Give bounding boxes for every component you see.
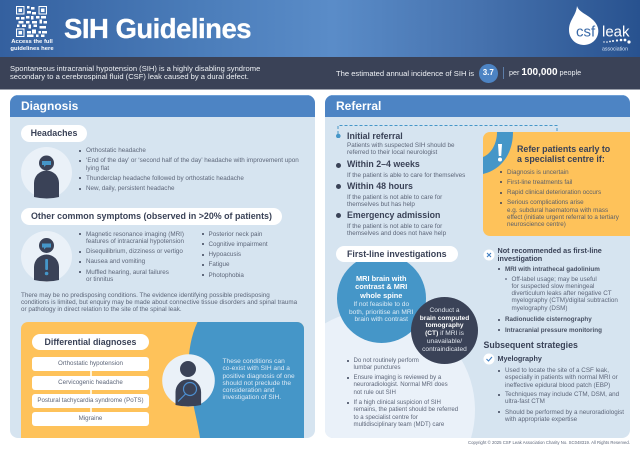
- text: predisposing conditions: conditions is limited, but enquiry may be made about connective tissue disorders and spinal trauma: [21, 299, 297, 306]
- list: headache symptoms: lying flat: [86, 165, 109, 172]
- text: CT recommendation: Conduct a: [429, 307, 460, 314]
- list: not recommended: MRI with intrathecal gadolinium: [505, 266, 600, 272]
- QR caption: [10, 38, 54, 52]
- QR code: [16, 6, 47, 37]
- box: migraine: Migraine: [79, 415, 102, 422]
- text: within 2-4 weeks: If the patient is able to care for themselves: [347, 172, 465, 178]
- title: SIH Guidelines: [64, 13, 251, 44]
- logo: CSF Leak Association: leak: [602, 24, 630, 40]
- heading: differential diagnoses: Differential diagnoses: [45, 337, 136, 347]
- icon: exclamation mark: [483, 132, 513, 174]
- heading: myelography: Myelography: [498, 354, 542, 363]
- text: predisposing conditions: There may be no predisposing conditions. The evidence identifying possible predisposing: [21, 292, 270, 298]
- heading: subsequent strategies: Subsequent strategies: [484, 340, 578, 350]
- list: myelography: with appropriate expertise: [505, 416, 577, 423]
- list: headache symptoms: New, daily, persistent headache: [86, 185, 174, 192]
- list: common symptoms column 2: Posterior neck pain: [208, 230, 262, 238]
- incidence rate: per 100,000 people: [509, 67, 581, 78]
- text: co-existing conditions: co-exist with SIH and a: [222, 365, 290, 372]
- callout list: e.g. subdural haematoma with mass: [507, 207, 608, 214]
- callout list: Serious complications arise: [507, 199, 584, 206]
- text: co-existing conditions: consideration and: [222, 387, 275, 394]
- text: MRI recommendation: MRI brain with: [356, 274, 406, 282]
- heading: headaches: [21, 125, 87, 142]
- list: common symptoms column 2: Fatigue: [208, 261, 230, 268]
- list: first-line notes: remains, the patient should be referred: [354, 406, 458, 413]
- text: emergency admission: themselves and does not have help: [347, 230, 446, 237]
- text: initial referral: [347, 142, 454, 156]
- icon: person with magnifier: [162, 354, 215, 407]
- heading: not recommended: investigation: [498, 254, 542, 263]
- box: PoTS: Postural tachycardia syndrome (PoTS): [37, 397, 144, 404]
- list: myelography: ultra-fast CTM: [505, 398, 545, 405]
- text: within 48 hours: themselves but has help: [347, 201, 415, 208]
- list: common symptoms column 2: Hypoacusis: [208, 251, 241, 258]
- box: cervicogenic headache: Cervicogenic headache: [58, 378, 123, 386]
- text: CT recommendation: tomography: [425, 322, 464, 329]
- list: myelography: especially in patients with normal MRI or: [505, 374, 618, 381]
- list: not recommended: myelography (DSM): [512, 305, 568, 312]
- list: headache symptoms: [79, 147, 299, 192]
- box: migraine: [32, 412, 149, 426]
- list: common symptoms column 1: Nausea and vomiting: [86, 258, 145, 265]
- box: cervicogenic headache: [32, 376, 149, 390]
- text: CT recommendation: unavailable/: [427, 338, 462, 345]
- list: not recommended: diverticulum leaks after negative CT: [512, 290, 612, 297]
- text: co-existing conditions: investigation of SIH.: [222, 394, 281, 401]
- list: not recommended: myelography (CTM)/digital subtraction: [512, 297, 618, 304]
- list: common symptoms column 1: Disequilibrium, dizziness or vertigo: [86, 248, 183, 255]
- list: not recommended: Radionuclide cisternography: [505, 316, 592, 323]
- list: myelography: ineffective epidural blood patch (EBP): [505, 382, 610, 389]
- text: initial referral: Patients with suspected SIH should be: [347, 142, 454, 149]
- heading: within 2-4 weeks: Within 2–4 weeks: [347, 159, 420, 169]
- list: first-line notes: lumbar punctures: [354, 364, 401, 371]
- callout list: neuroscience centre): [507, 221, 566, 228]
- list: first-line notes: to a specialist centre for: [354, 414, 418, 421]
- text: co-existing conditions: positive diagnosis of one: [222, 373, 295, 380]
- text: CT recommendation: (CT) if MRI is: [425, 330, 464, 337]
- box: orthostatic hypotension: Orthostatic hypotension: [58, 360, 123, 367]
- referral heading: Referral: [336, 99, 381, 113]
- text: within 48 hours: [347, 194, 442, 208]
- heading: not recommended: Not recommended as first-line: [498, 246, 602, 254]
- list: common symptoms column 1: [79, 230, 184, 283]
- icon: cross: [484, 250, 494, 260]
- heading: other symptoms: Other common symptoms (observed in >20% of patients): [31, 211, 272, 221]
- list: common symptoms column 2: [202, 230, 268, 279]
- light background shape: [325, 316, 475, 438]
- icon: big blue MRI circle: [336, 254, 426, 343]
- text: CT recommendation: [420, 307, 469, 353]
- callout list: [500, 168, 619, 228]
- intro text: Spontaneous intracranial hypotension (SIH) is a highly disabling syndrome: [10, 64, 260, 72]
- list: headache symptoms: Thunderclap headache followed by orthostatic headache: [86, 175, 244, 182]
- text: MRI recommendation: [349, 274, 414, 323]
- logo: CSF Leak Association: association: [602, 46, 628, 52]
- list: first-line notes: neuroradiologist. Normal MRI does: [354, 381, 448, 388]
- callout heading: [517, 144, 610, 164]
- intro text: secondary to a cerebrospinal fluid (CSF) leak caused by a dural defect.: [10, 72, 249, 81]
- list: first-line notes: Ensure imaging is reviewed by a: [354, 374, 441, 381]
- list: headache symptoms: Orthostatic headache: [86, 147, 146, 154]
- list: myelography: Techniques may include CTM, DSM, and: [505, 391, 619, 398]
- heading: emergency admission: Emergency admission: [347, 210, 440, 220]
- QR caption: guidelines here: [10, 46, 54, 52]
- list: first-line notes: [347, 357, 458, 428]
- heading: within 48 hours: Within 48 hours: [347, 181, 413, 191]
- list: first-line notes: multidisciplinary team (MDT) care: [354, 421, 444, 428]
- connector: [90, 370, 92, 414]
- text: co-existing conditions: These conditions can: [222, 358, 285, 365]
- heading: headaches: Headaches: [31, 128, 77, 138]
- callout list: effect (initiate urgent referral to a tertiary: [507, 214, 619, 221]
- list: common symptoms column 2: Cognitive impairment: [208, 241, 268, 248]
- panel: referral: [325, 95, 630, 438]
- callout heading: a specialist centre if:: [517, 154, 605, 164]
- intro band: [0, 57, 640, 90]
- heading: not recommended: [498, 246, 602, 263]
- text: emergency admission: If the patient is not able to care for: [347, 222, 442, 230]
- incidence text: The estimated annual incidence of SIH is: [336, 69, 474, 78]
- copyright: Copyright © 2025 CSF Leak Association Charity No. SC048319. All Rights Reserved.: [468, 440, 630, 445]
- text: CT recommendation: contraindicated: [422, 346, 467, 353]
- callout list: First-line treatments fail: [507, 179, 572, 186]
- heading: initial referral: Initial referral: [347, 131, 403, 141]
- list: myelography: Should be performed by a neuroradiologist: [505, 409, 624, 416]
- heading: other symptoms: [21, 208, 282, 225]
- text: emergency admission: [347, 222, 446, 237]
- blue background shape: [189, 322, 304, 438]
- bullet: off-label: [505, 278, 507, 280]
- list: common symptoms column 1: Muffled hearing, aural failures: [86, 268, 169, 276]
- icon: person with headache: [21, 147, 72, 198]
- text: MRI recommendation: brain with contrast: [354, 316, 408, 323]
- list: common symptoms column 1: features of intracranial hypotension: [86, 238, 184, 245]
- icon: dark CT circle: [411, 297, 478, 364]
- callout heading: Refer patients early to: [517, 144, 610, 154]
- icon: check: [484, 354, 494, 364]
- list: myelography: Used to locate the site of a CSF leak,: [505, 367, 609, 374]
- list: not recommended: Intracranial pressure monitoring: [505, 326, 602, 334]
- text: MRI recommendation: both, prioritise an MRI: [349, 309, 414, 316]
- incidence value badge: 3.7: [483, 68, 494, 77]
- list: not recommended: for suspected slow meningeal: [512, 283, 594, 290]
- text: co-existing conditions: should not preclude the: [222, 380, 291, 387]
- list: common symptoms column 1: or tinnitus: [86, 276, 113, 283]
- bullet: 48 hours: [336, 184, 341, 189]
- heading: differential diagnoses: [32, 334, 149, 350]
- logo: CSF Leak Association: csf: [576, 24, 596, 40]
- text: predisposing conditions: or pathology in direct relation to the site of the spinal leak.: [21, 306, 182, 313]
- bullet: 2-4 weeks: [336, 162, 341, 168]
- diagnosis header: [10, 95, 315, 117]
- text: within 48 hours: If the patient is not able to care for: [347, 194, 442, 200]
- list: not recommended: Off-label usage; may be useful: [512, 276, 597, 282]
- heading: first-line investigations: [336, 246, 458, 262]
- intro text: [10, 64, 260, 81]
- list: first-line notes: If a high clinical suspicion of SIH: [354, 399, 441, 406]
- list: common symptoms column 1: Magnetic resonance imaging (MRI): [86, 230, 184, 238]
- callout list: Diagnosis is uncertain: [507, 168, 569, 176]
- list: myelography: [498, 367, 624, 423]
- text: predisposing conditions: [21, 292, 298, 313]
- box: PoTS: [32, 394, 149, 408]
- list: not recommended: [498, 266, 618, 334]
- text: co-existing conditions: [222, 358, 295, 401]
- text: MRI recommendation: If not feasible to do: [353, 301, 409, 308]
- callout list: Rapid clinical deterioration occurs: [507, 189, 601, 196]
- diagnosis heading: Diagnosis: [21, 99, 78, 113]
- panel: differential diagnoses: [21, 322, 304, 438]
- box: orthostatic hypotension: [32, 357, 149, 371]
- header banner: [0, 0, 640, 57]
- text: MRI recommendation: contrast & MRI: [355, 282, 407, 291]
- text: initial referral: referred to their local neurologist: [347, 149, 437, 156]
- text: CT recommendation: brain computed: [420, 315, 469, 322]
- list: first-line notes: Do not routinely perform: [354, 357, 419, 364]
- referral header: [325, 95, 630, 117]
- list: headache symptoms: ‘End of the day’ or ‘second half of the day’ headache with improvement upon: [86, 157, 299, 164]
- list: first-line notes: not rule out SIH: [354, 389, 396, 396]
- text: MRI recommendation: whole spine: [360, 291, 402, 300]
- callout: refer early: [483, 132, 630, 236]
- panel: diagnosis: [10, 95, 315, 438]
- bullet: emergency: [336, 213, 341, 218]
- list: common symptoms column 2: Photophobia: [208, 272, 244, 279]
- incidence value badge: [479, 64, 498, 82]
- logo: CSF Leak Association: [569, 6, 631, 52]
- QR caption: Access the full: [11, 38, 53, 44]
- icon: person with alert: [21, 231, 72, 282]
- referral timeline connector: [336, 125, 558, 138]
- heading: first-line investigations: First-line investigations: [347, 249, 447, 259]
